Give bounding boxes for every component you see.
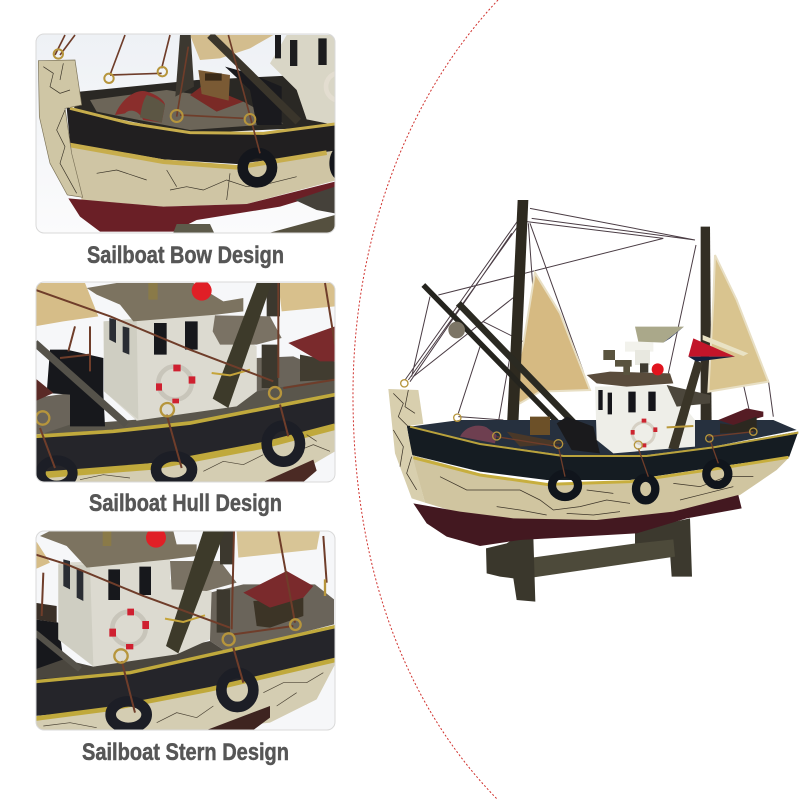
- aft deck box: [718, 408, 763, 425]
- heading: bow: Sailboat Bow Design: [87, 242, 284, 269]
- heading: stern: Sailboat Stern Design: [82, 739, 289, 766]
- pulley: [448, 322, 465, 338]
- deck interior: [410, 420, 797, 455]
- bow post: [388, 389, 425, 503]
- aft mast: [701, 227, 712, 430]
- red pennant: [688, 338, 735, 357]
- hull black band: [407, 425, 798, 480]
- panel: hull detail photo: [35, 281, 335, 486]
- aft sail: [708, 255, 768, 392]
- stand: left upright: [486, 533, 535, 602]
- booms: [423, 285, 603, 453]
- fore sail: [512, 273, 590, 403]
- fender ropes and brass eyes: [401, 380, 757, 477]
- panel: bow detail photo: [36, 34, 354, 233]
- heading: hull: Sailboat Hull Design: [89, 490, 282, 517]
- hull cream band: [412, 455, 790, 522]
- fender tyres: [552, 463, 728, 500]
- rigging: [405, 208, 773, 432]
- hull red bottom: [413, 495, 742, 546]
- main mast: [506, 200, 528, 447]
- main sailboat model: [388, 200, 798, 602]
- cabin: [587, 327, 710, 453]
- red dotted divider arc: [353, 0, 498, 800]
- panel: stern detail photo: [35, 528, 335, 730]
- stand: cross beam: [527, 539, 675, 578]
- crackle texture: [393, 390, 753, 515]
- panel borders: [36, 34, 335, 730]
- stand: right upright: [635, 518, 692, 577]
